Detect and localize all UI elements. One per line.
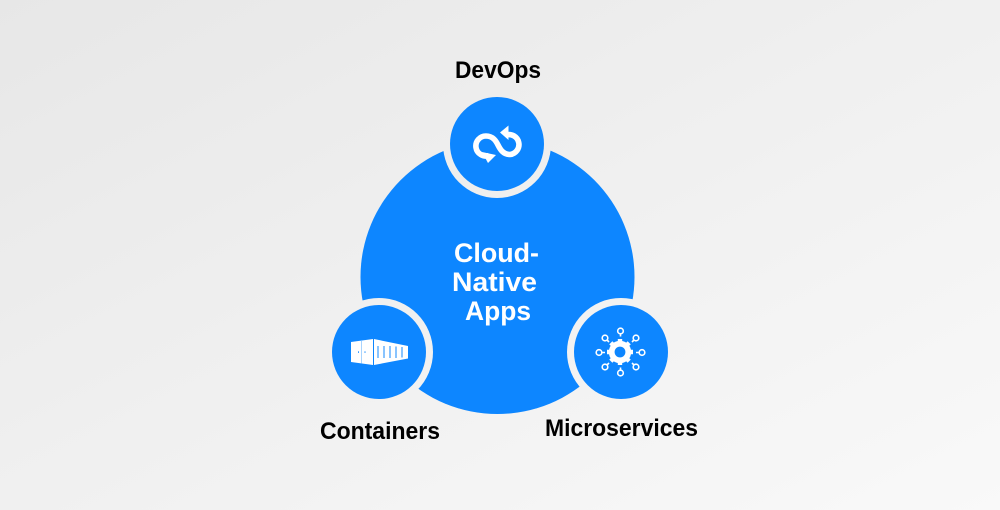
node: DevOps — [443, 57, 551, 198]
label: Containers: Containers — [320, 418, 440, 445]
central circle: Cloud-Native Apps — [360, 140, 634, 414]
label: DevOps: DevOps — [455, 57, 541, 84]
node: Containers — [320, 298, 440, 445]
central label: Cloud- — [454, 238, 539, 268]
central label: Apps — [465, 296, 531, 326]
central label — [452, 238, 539, 326]
node: Microservices — [545, 298, 698, 442]
label: Microservices: Microservices — [545, 415, 698, 442]
icon: DevOps loop arrows — [476, 126, 519, 163]
icon: shipping container — [351, 339, 408, 365]
central label: Native — [452, 267, 537, 297]
icon: gear with connected nodes — [596, 328, 645, 376]
